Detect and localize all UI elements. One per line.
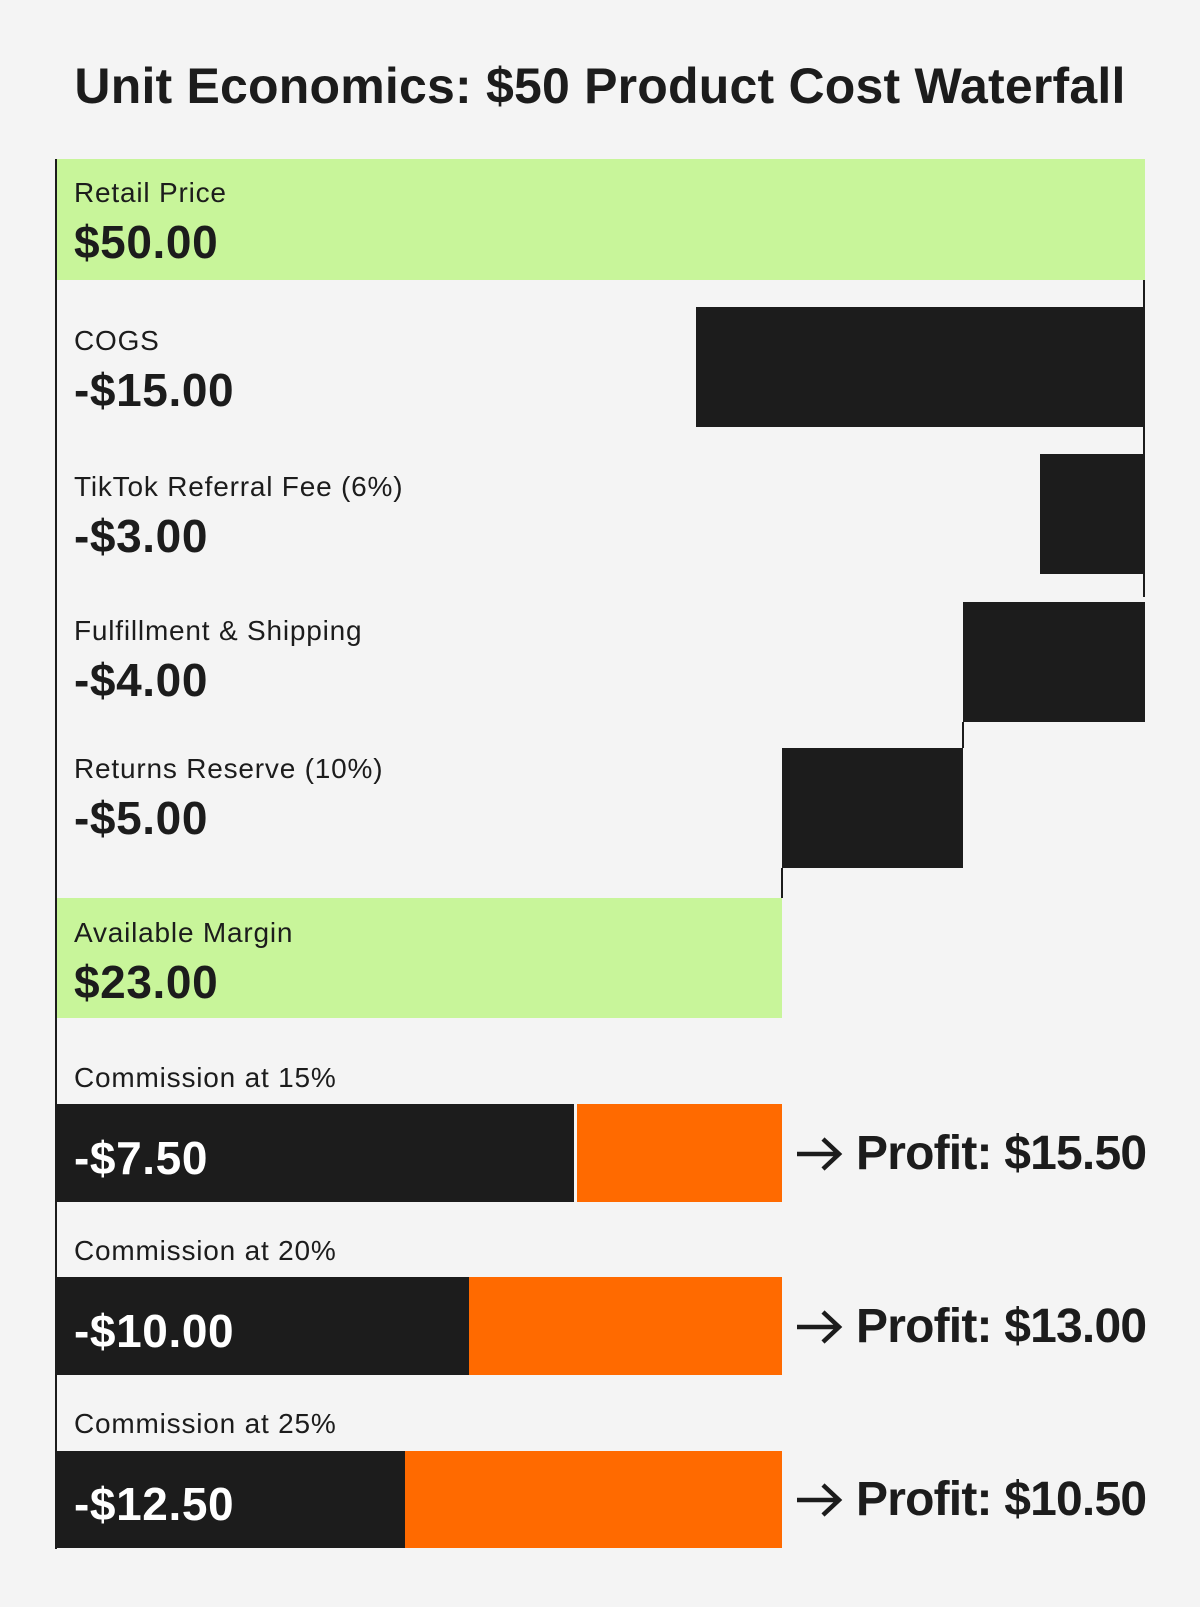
label: referral fee: TikTok Referral Fee (6%): [74, 471, 403, 502]
label: retail price: [74, 177, 227, 268]
label: COGS: COGS: [74, 325, 160, 356]
title: Unit Economics: $50 Product Cost Waterfall: [74, 58, 1126, 114]
commission 15%: [57, 1062, 1146, 1202]
axis line: [55, 159, 57, 1549]
commission 15%: Commission at 15%: [74, 1062, 337, 1093]
commission 20%: [57, 1235, 1146, 1375]
commission 20%: Commission at 20%: [74, 1235, 337, 1266]
bar: available margin: [57, 898, 782, 1018]
bar: fulfillment: [963, 602, 1145, 722]
label: COGS: [74, 325, 234, 416]
label: fulfillment: -$4.00: [74, 654, 208, 706]
label: available margin: Available Margin: [74, 917, 293, 948]
commission 25%: [57, 1408, 1146, 1548]
label: returns: [74, 753, 383, 844]
label: retail price: $50.00: [74, 216, 218, 268]
label: available margin: [74, 917, 293, 1008]
commission 20%: -$10.00: [74, 1305, 234, 1357]
label: returns: -$5.00: [74, 792, 208, 844]
label: COGS: -$15.00: [74, 364, 234, 416]
commission 15%: Profit: $15.50: [856, 1127, 1146, 1180]
label: fulfillment: [74, 615, 362, 706]
connectors: [1143, 280, 1145, 597]
commission 25%: -$12.50: [74, 1478, 234, 1530]
bar: COGS: [696, 307, 1145, 427]
label: referral fee: -$3.00: [74, 510, 208, 562]
commission 15%: -$7.50: [74, 1132, 208, 1184]
label: retail price: Retail Price: [74, 177, 227, 208]
bar: retail price: [57, 159, 1145, 280]
label: returns: Returns Reserve (10%): [74, 753, 383, 784]
label: referral fee: [74, 471, 403, 562]
label: available margin: $23.00: [74, 956, 218, 1008]
commission 20%: Profit: $13.00: [856, 1300, 1146, 1353]
bar: referral fee: [1040, 454, 1145, 574]
label: fulfillment: Fulfillment & Shipping: [74, 615, 362, 646]
commission 25%: Commission at 25%: [74, 1408, 337, 1439]
bar: returns: [782, 748, 963, 868]
commission 25%: Profit: $10.50: [856, 1473, 1146, 1526]
